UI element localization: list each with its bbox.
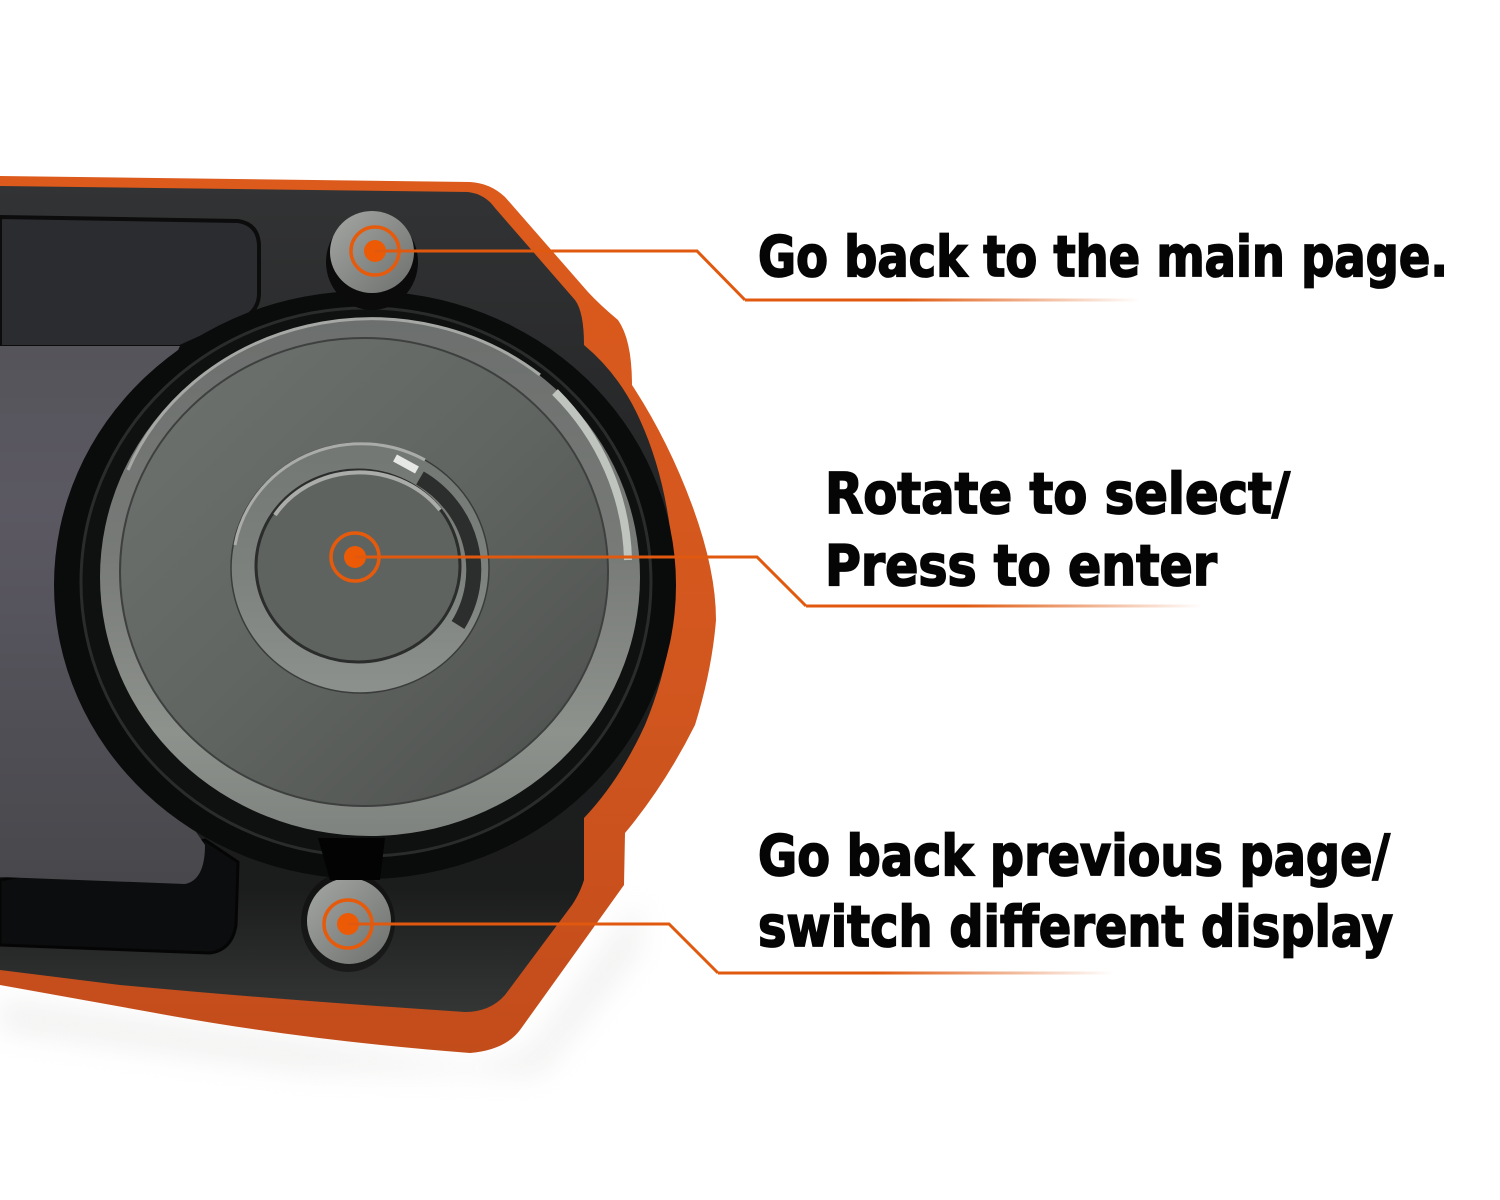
upper dark display panel bbox=[0, 217, 259, 347]
callout: main page button bbox=[351, 225, 1448, 302]
black bezel bbox=[0, 186, 675, 1012]
knob centre ring bbox=[231, 443, 489, 693]
lower black display panel bbox=[0, 840, 238, 953]
top button bbox=[326, 211, 418, 310]
knob recess bbox=[54, 291, 676, 879]
device photo illustration bbox=[0, 176, 716, 1075]
callout: previous page button: Go back previous page/ bbox=[758, 824, 1390, 889]
bottom button bbox=[301, 872, 395, 972]
orange rubber case bbox=[0, 176, 716, 1053]
rotary knob bbox=[100, 318, 640, 836]
callout: rotary knob bbox=[331, 462, 1290, 608]
shadow at knob base bbox=[318, 838, 385, 880]
callout: previous page button: switch different display bbox=[758, 895, 1393, 960]
callout: previous page button bbox=[324, 824, 1393, 974]
screen bbox=[0, 346, 205, 884]
callout: rotary knob: Rotate to select/ bbox=[825, 462, 1290, 527]
ground shadow bbox=[0, 900, 640, 1075]
callout: rotary knob: Press to enter bbox=[825, 534, 1217, 599]
